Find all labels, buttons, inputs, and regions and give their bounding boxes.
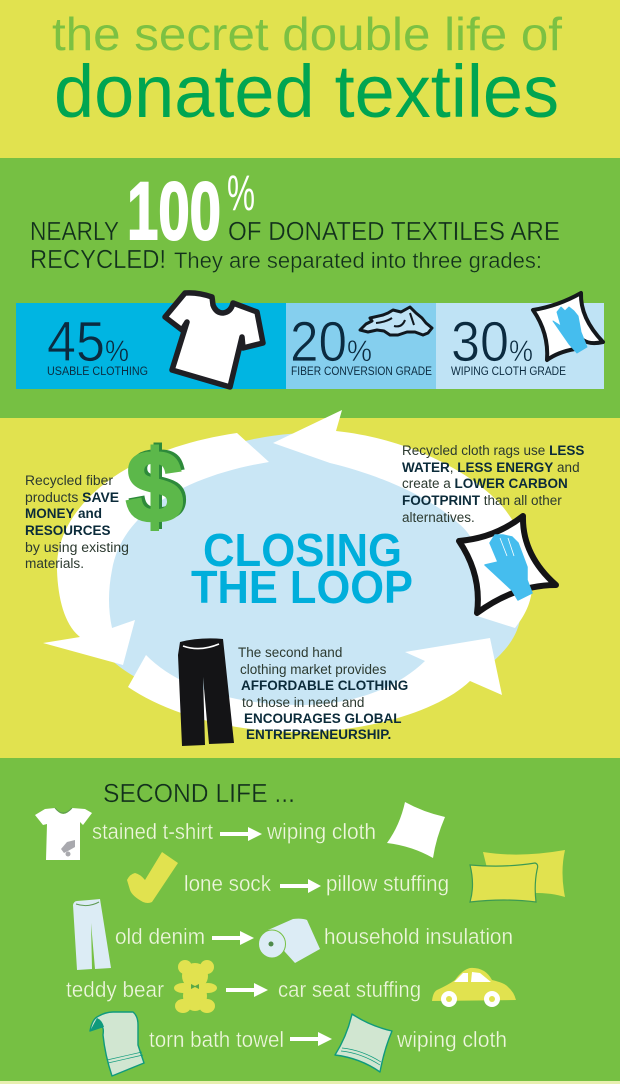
- arrow: right arc: [273, 410, 533, 628]
- text: second hand market: clothing market provides: [240, 662, 387, 677]
- panel: closing the loop: [0, 410, 620, 758]
- row: old denim to household insulation: household insulation: [324, 924, 513, 949]
- heading: closing the loop: CLOSING: [203, 524, 402, 576]
- headline: nearly 100% recycled: [30, 165, 560, 274]
- headline: nearly 100% recycled: %: [227, 165, 255, 221]
- stat: 20% fiber conversion grade: FIBER CONVERSION GRADE: [291, 366, 432, 378]
- text: second hand market: ENCOURAGES GLOBAL: [244, 711, 402, 726]
- title line: the secret double life of: the secret double life of: [52, 8, 562, 60]
- text: second hand market: AFFORDABLE CLOTHING: [241, 678, 408, 693]
- stat: 45% usable clothing: [16, 303, 286, 389]
- row: old denim to household insulation: [73, 899, 513, 970]
- stat: 30% wiping cloth grade: %: [509, 335, 533, 368]
- arrow: bottom arc: [128, 638, 502, 732]
- headline: nearly 100% recycled: NEARLY: [30, 216, 119, 246]
- heading: closing the loop: [191, 524, 413, 613]
- row: teddy bear to car seat stuffing: car seat stuffing: [278, 977, 421, 1002]
- stat: 20% fiber conversion grade: %: [347, 335, 372, 368]
- stat: 30% wiping cloth grade: WIPING CLOTH GRADE: [451, 366, 566, 378]
- row: teddy bear to car seat stuffing: teddy bear: [66, 977, 164, 1002]
- text: recycled fiber: MONEY and: [25, 506, 102, 521]
- headline: nearly 100% recycled: They are separated into three grades:: [174, 248, 542, 273]
- row: stained t-shirt to wiping cloth: wiping cloth: [266, 819, 376, 844]
- row: torn bath towel to wiping cloth: wiping cloth: [396, 1027, 507, 1052]
- stat: 20% fiber conversion grade: [286, 303, 436, 389]
- text: second hand market: The second hand: [238, 645, 342, 660]
- text: second hand market: to those in need and: [242, 695, 364, 710]
- icon: wiping cloth with glove: [533, 293, 603, 360]
- text: recycled fiber: products SAVE: [25, 490, 119, 505]
- row: teddy bear to car seat stuffing: [66, 960, 516, 1013]
- text: recycled cloth rags: create a LOWER CARBON: [402, 476, 568, 491]
- loop background ellipse: [85, 433, 521, 717]
- icon: black trousers: [178, 638, 234, 746]
- heading: second life: SECOND LIFE ...: [103, 778, 295, 808]
- icon: wiping cloth with glove large: [459, 516, 556, 613]
- row: lone sock to pillow stuffing: pillow stuffing: [326, 871, 449, 896]
- arrow: top-left arc: [43, 433, 269, 665]
- text: second hand market: ENTREPRENEURSHIP.: [246, 727, 391, 742]
- row: torn bath towel to wiping cloth: torn bath towel: [149, 1027, 284, 1052]
- text: recycled fiber: by using existing: [25, 540, 129, 555]
- text: recycled cloth rags: WATER, LESS ENERGY and: [402, 460, 580, 475]
- stat: 45% usable clothing: %: [105, 335, 129, 368]
- row: lone sock to pillow stuffing: lone sock: [184, 871, 272, 896]
- stat: 45% usable clothing: 45: [47, 310, 105, 374]
- icon: dollar sign: $: [129, 428, 186, 542]
- title line: donated textiles: donated textiles: [54, 50, 559, 133]
- headline: nearly 100% recycled: 100: [127, 166, 221, 257]
- headline: nearly 100% recycled: OF DONATED TEXTILES ARE: [228, 216, 560, 246]
- stat: 30% wiping cloth grade: 30: [451, 310, 509, 374]
- row: stained t-shirt to wiping cloth: stained t-shirt: [92, 819, 213, 844]
- text: recycled fiber: RESOURCES: [25, 523, 111, 538]
- stat: 30% wiping cloth grade: [436, 303, 604, 389]
- stat: 20% fiber conversion grade: 20: [290, 310, 347, 374]
- text: recycled fiber: materials.: [25, 556, 84, 571]
- text: recycled cloth rags: Recycled cloth rags use LESS: [402, 443, 584, 458]
- panel: second life: [0, 758, 620, 1084]
- headline: nearly 100% recycled: RECYCLED!: [30, 244, 166, 274]
- title panel: [0, 0, 620, 158]
- icon: fiber cloud: [360, 307, 432, 335]
- stat: 45% usable clothing: USABLE CLOTHING: [47, 366, 148, 378]
- heading: closing the loop: THE LOOP: [191, 561, 413, 613]
- icon: dollar sign: $: [126, 430, 183, 544]
- text: recycled cloth rags: alternatives.: [402, 510, 475, 525]
- row: stained t-shirt to wiping cloth: [35, 802, 445, 860]
- text: recycled fiber: [25, 473, 129, 571]
- text: recycled cloth rags: FOOTPRINT than all other: [402, 493, 562, 508]
- row: old denim to household insulation: old denim: [115, 924, 205, 949]
- icon: t-shirt: [165, 293, 263, 387]
- text: recycled cloth rags: [402, 443, 584, 525]
- row: lone sock to pillow stuffing: [127, 850, 565, 903]
- panel: three grades: [0, 158, 620, 418]
- row: torn bath towel to wiping cloth: [90, 1012, 507, 1076]
- text: second hand market: [238, 645, 408, 742]
- text: recycled fiber: Recycled fiber: [25, 473, 114, 488]
